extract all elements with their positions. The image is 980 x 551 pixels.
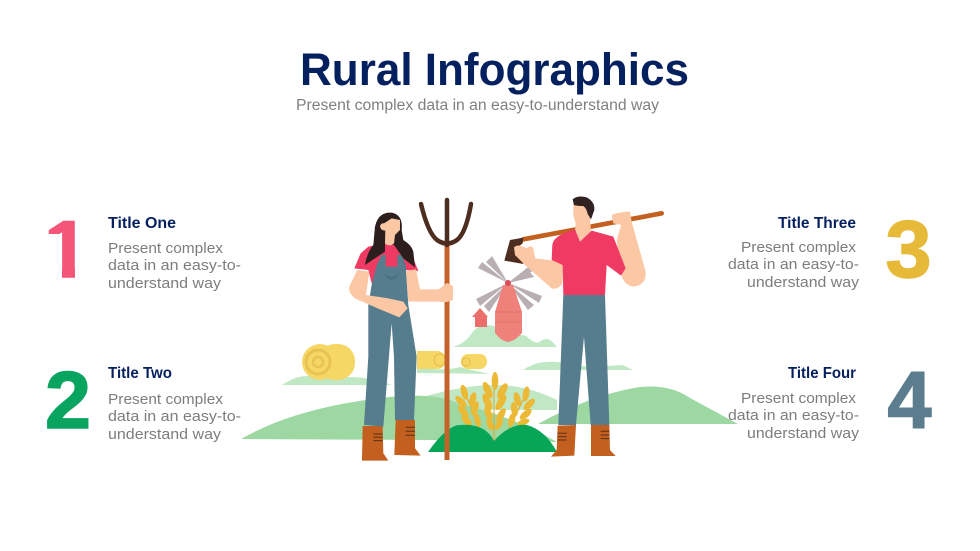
- heading: title four: Title Four: [788, 365, 856, 382]
- arms behind shirt: [617, 222, 646, 287]
- small barn: [472, 308, 488, 327]
- heading: title three: Title Three: [778, 215, 856, 232]
- shirt: [354, 243, 418, 283]
- text block: item 1: [108, 240, 241, 292]
- number 1: 1: [44, 205, 89, 295]
- text block: item 4: understand way: [747, 425, 860, 442]
- icon: windmill: [472, 256, 542, 342]
- man figure: [504, 197, 662, 457]
- text block: item 3: Present complex: [741, 239, 857, 256]
- hay bales: [302, 344, 487, 380]
- text block: item 4: Present complex: [741, 390, 857, 407]
- trousers: [558, 295, 609, 425]
- boots: [551, 425, 576, 457]
- icon: wheat plants: [453, 372, 537, 441]
- number 2: 2: [45, 356, 91, 446]
- foreground mounds: [428, 425, 557, 452]
- illustration: rural landscape: [241, 197, 738, 461]
- text block: item 3: data in an easy-to-: [728, 256, 859, 273]
- hoe: [523, 213, 662, 239]
- overalls: [364, 255, 417, 427]
- number 3: 3: [886, 205, 932, 295]
- text block: item 3: understand way: [747, 274, 860, 291]
- text block: item 1: understand way: [108, 275, 222, 292]
- boots: [362, 426, 388, 461]
- text block: item 1: Present complex: [108, 240, 224, 257]
- arms: [349, 270, 408, 317]
- text block: item 3: [728, 239, 860, 291]
- text block: item 1: data in an easy-to-: [108, 257, 241, 274]
- shirt: [552, 229, 626, 295]
- number 4: 4: [888, 356, 932, 446]
- heading: title two: Title Two: [108, 365, 172, 382]
- item 1: [48, 216, 240, 291]
- background hills: [241, 325, 738, 442]
- face: [380, 218, 400, 245]
- hands: [612, 212, 632, 225]
- text block: item 2: [108, 391, 241, 443]
- neck and head: [575, 217, 591, 242]
- text block: item 2: data in an easy-to-: [108, 408, 241, 425]
- text block: item 2: understand way: [108, 426, 222, 443]
- item 4: [728, 356, 932, 446]
- pitchfork: [421, 200, 471, 460]
- text block: item 4: [728, 390, 860, 442]
- heading: title one: Title One: [108, 215, 176, 232]
- item 2: [45, 356, 241, 446]
- hair: [365, 213, 415, 267]
- text block: item 2: Present complex: [108, 391, 224, 408]
- title: Rural Infographics: [300, 44, 689, 95]
- text block: item 4: data in an easy-to-: [728, 407, 859, 424]
- woman figure: [349, 213, 442, 461]
- subtitle: Present complex data in an easy-to-understand way: [296, 97, 659, 114]
- item 3: [728, 205, 932, 295]
